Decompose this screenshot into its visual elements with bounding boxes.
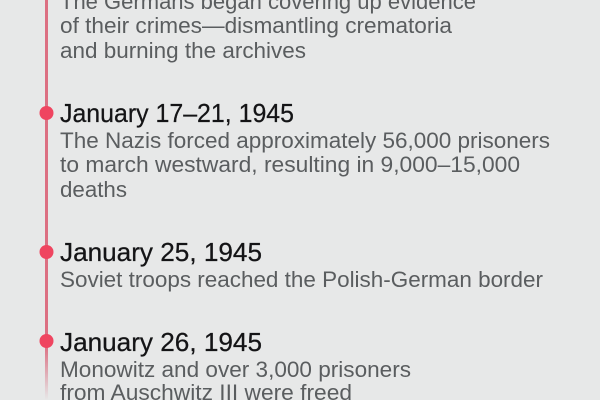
event: January 25, 1945 xyxy=(40,237,543,292)
description: deaths xyxy=(60,177,127,202)
event: evidence cover-up: and burning the archives xyxy=(60,38,306,63)
description xyxy=(60,128,550,202)
description xyxy=(60,357,411,400)
description: to march westward, resulting in 9,000–15,000 xyxy=(60,152,520,177)
event: evidence cover-up xyxy=(60,0,476,63)
marker dot xyxy=(40,245,54,259)
event: January 17–21, 1945 xyxy=(40,98,550,202)
event: evidence cover-up: of their crimes—dismantling crematoria xyxy=(60,13,452,38)
marker dot xyxy=(40,334,54,348)
event: January 26, 1945 xyxy=(40,327,411,400)
description: The Nazis forced approximately 56,000 prisoners xyxy=(60,128,550,153)
date heading: January 25, 1945 xyxy=(60,237,262,267)
description: Soviet troops reached the Polish-German border xyxy=(60,267,543,292)
date heading: January 26, 1945 xyxy=(60,327,262,357)
description: Monowitz and over 3,000 prisoners xyxy=(60,357,411,382)
timeline axis xyxy=(44,0,49,400)
date heading: January 17–21, 1945 xyxy=(60,98,294,128)
marker dot xyxy=(40,106,54,120)
